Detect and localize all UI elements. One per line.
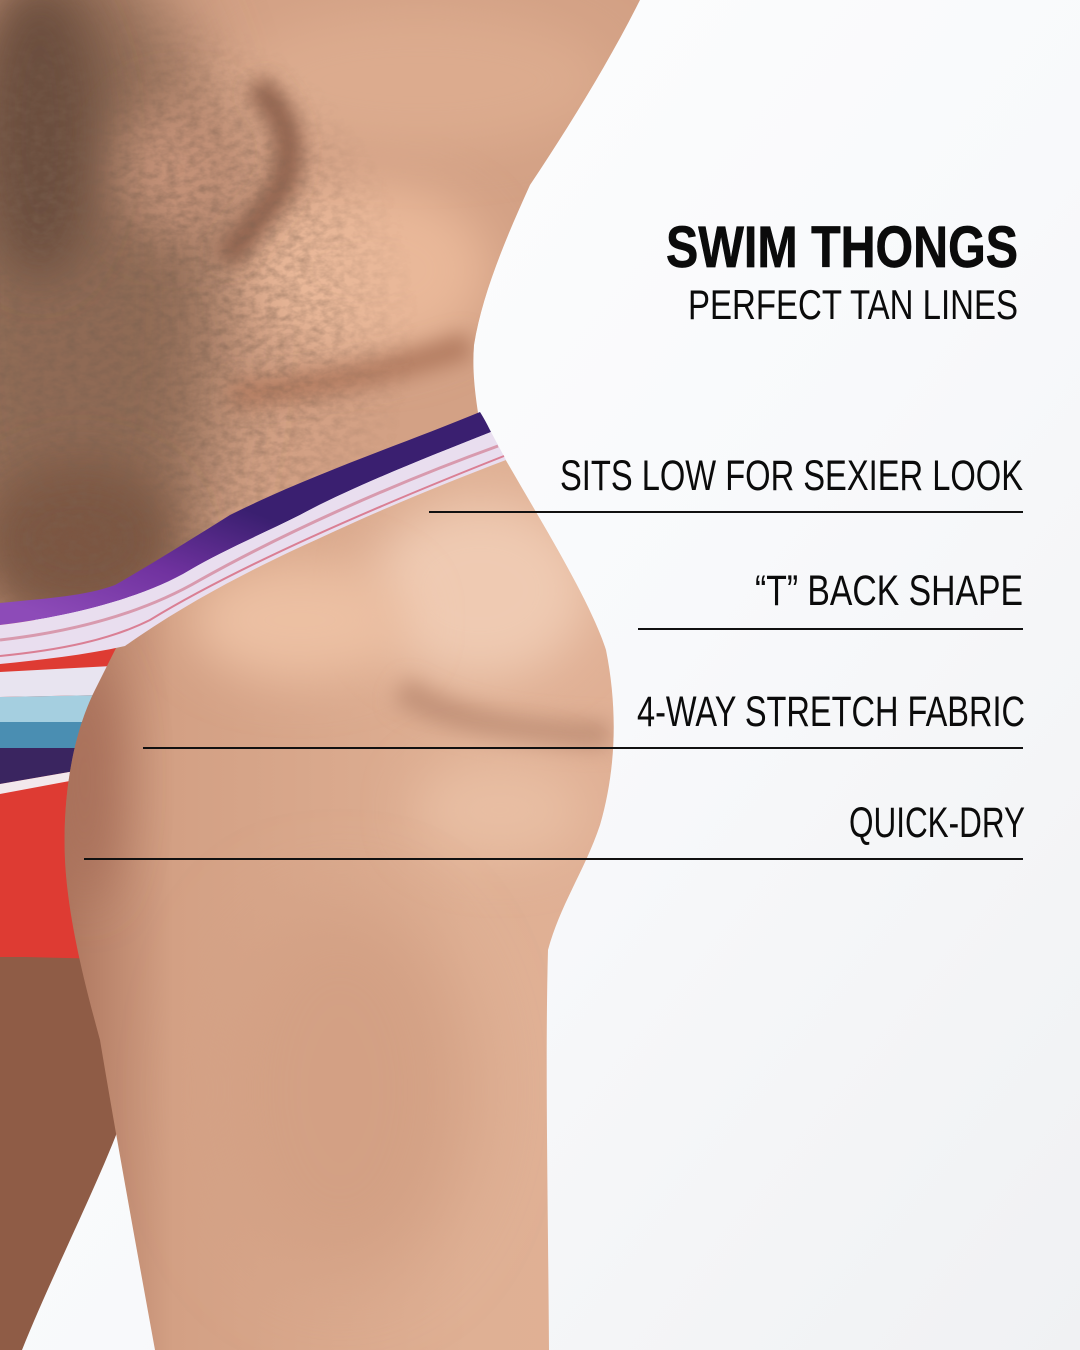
swimwear: red pouch with stripes: [0, 620, 150, 960]
hip and thigh: [64, 460, 614, 1350]
torso: [0, 0, 640, 670]
waistband: [0, 412, 506, 664]
title: SWIM THONGS: [666, 215, 1018, 280]
photo: torso and hip: [0, 0, 650, 1350]
rear leg: [0, 945, 125, 1350]
